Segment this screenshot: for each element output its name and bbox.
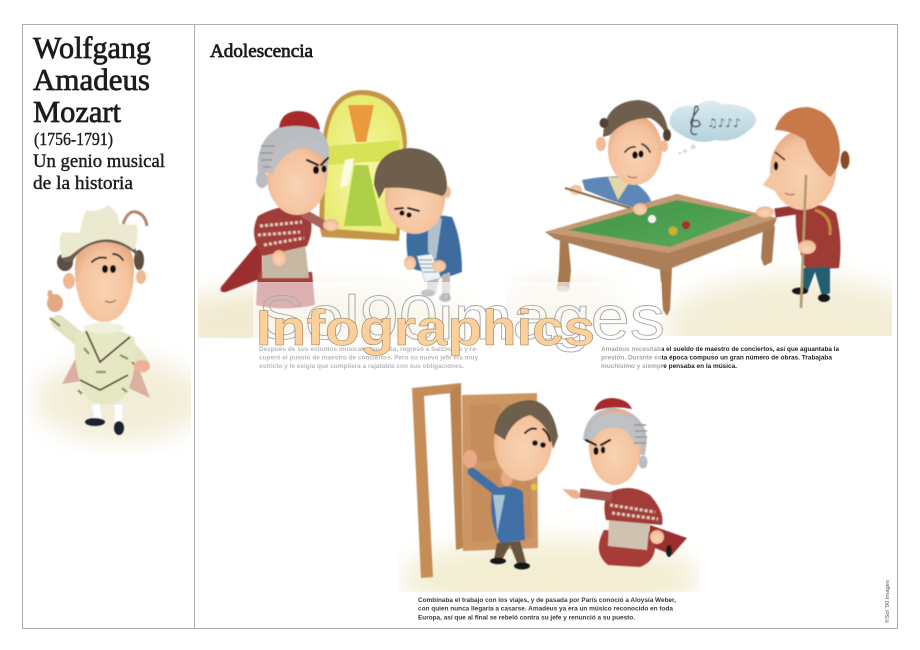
illustration: young Mozart portrait [35,205,205,442]
scene 3: Mozart resigns at the door [400,383,700,616]
title block: (1756-1791) [34,129,113,150]
player with red coat [756,107,850,308]
caption: scene 1 [259,346,479,370]
section heading: Adolescencia [210,41,314,62]
title block: Un genio musical [33,152,165,172]
caption: scene 1: estricto y le exigía que cumpliera a rajatabla con sus obligaciones. [259,363,464,370]
door and frame [412,383,538,578]
thought cloud with music notes [670,101,756,154]
title block [33,30,165,194]
watermark overlay: Infographics [256,300,595,356]
title block: de la historia [33,174,133,194]
thought cloud with music notes: ♫♪♪♪ [707,116,741,130]
copyright credit: ©Sol '90 Images [884,580,891,623]
caption: scene 3: con quien nunca llegaría a casarse. Amadeus ya era un músico reconocido en toda [418,606,674,612]
young Mozart with score [406,215,462,278]
billiard table [545,188,777,316]
caption: scene 2: muchísimo y siempre pensaba en la música. [601,363,737,370]
caption: scene 2: presión. Durante esta época compuso un gran número de obras. Trabajaba [601,354,833,362]
caption: scene 3: Combinaba el trabajo con los viajes, y de pasada por París conoció a Aloysia Weber, [418,597,676,604]
scene 2: billiards [505,99,892,336]
archbishop pointing [562,398,687,567]
caption: scene 1: cuperó el puesto de maestro de conciertos. Pero su nuevo jefe era muy [259,354,479,362]
watermark overlay: Sol90images [258,284,665,353]
Mozart [463,400,558,570]
caption: scene 2: Amadeus necesitaba el sueldo de maestro de conciertos, así que aguantaba la [601,346,840,353]
stained-glass window [319,90,407,241]
caption: scene 1: Después de sus estudios musicales en Italia, regresó a Salzburgo y re- [259,346,478,353]
watermark overlay [253,282,665,372]
title block: Wolfgang [33,30,151,65]
player with curly hair [570,100,671,210]
caption: scene 3 [418,597,676,622]
title block: Mozart [33,94,121,129]
title block: Amadeus [33,62,150,97]
caption: scene 3: Europa, así que al final se rebeló contra su jefe y renunció a su puesto. [418,614,635,622]
scene 1: archbishop and Mozart [198,89,472,338]
caption: scene 2 [601,346,840,370]
